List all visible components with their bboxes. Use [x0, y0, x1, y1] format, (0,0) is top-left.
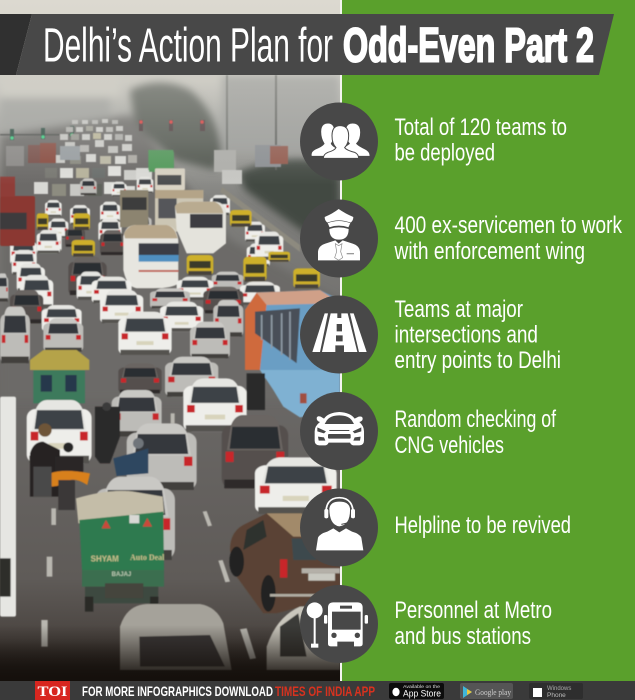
poles and signals — [0, 75, 277, 170]
text: intersections: Teams at major — [394, 296, 523, 323]
mid traffic cars — [48, 218, 68, 238]
text: helpline: Helpline to be revived — [394, 512, 571, 539]
icon: officer — [318, 209, 360, 260]
item 5: helpline — [300, 488, 571, 566]
text: CNG — [394, 406, 556, 459]
logo: TOI — [35, 681, 70, 700]
text: intersections: entry points to Delhi — [394, 347, 561, 374]
item 4: CNG — [300, 392, 556, 470]
item 3: intersections — [300, 296, 561, 374]
badge: App Store: App Store — [403, 688, 441, 698]
text: CNG: Random checking of — [394, 406, 556, 433]
text: intersections — [394, 296, 561, 374]
icon: bus — [324, 602, 368, 646]
text: ex-servicemen: with enforcement wing — [394, 238, 585, 265]
title text: Delhi’s Action Plan for — [43, 20, 333, 72]
green truck — [76, 491, 165, 612]
orange-blue bus lower — [260, 370, 340, 417]
bottom dark fade — [0, 628, 340, 674]
footer text: FOR MORE INFOGRAPHICS DOWNLOAD — [82, 683, 273, 699]
badge: App Store: Available on the — [403, 684, 441, 689]
bottom cars — [120, 604, 232, 670]
badge: App Store — [389, 683, 444, 699]
badge: Windows Phone — [529, 683, 583, 699]
text: metro and bus: Personnel at Metro — [394, 597, 552, 624]
text: CNG: CNG vehicles — [394, 432, 504, 459]
icon: bus stop — [307, 602, 368, 648]
photo: traffic jam in smog — [0, 0, 340, 681]
green truck: BAJAJ — [112, 572, 131, 578]
top cars — [118, 363, 162, 393]
lower section — [0, 350, 340, 670]
panel: green background — [342, 0, 635, 681]
motorbikes — [30, 373, 265, 510]
text: metro and bus — [394, 597, 552, 650]
icon: car — [315, 412, 364, 445]
text: intersections: intersections and — [394, 322, 538, 348]
green truck: SHYAM — [91, 555, 119, 564]
logo: TOI: TOI — [38, 684, 68, 700]
near cars upper — [212, 272, 243, 292]
badge: Windows Phone: Windows — [547, 686, 571, 692]
item 1: teams — [300, 102, 567, 180]
top haze — [0, 75, 340, 185]
text: teams: Total of 120 teams to — [394, 114, 567, 141]
text: teams — [394, 114, 567, 167]
buses — [0, 150, 226, 288]
badge: Google play — [460, 683, 513, 699]
text: metro and bus: and bus stations — [394, 623, 531, 650]
badge: Windows Phone: Phone — [547, 692, 566, 699]
text: teams: be deployed — [394, 140, 495, 167]
item 2: ex-servicemen — [300, 200, 623, 278]
white bus left — [0, 397, 16, 617]
text: ex-servicemen — [394, 212, 623, 265]
distant traffic — [6, 119, 288, 197]
badge: Google play: Google play — [475, 687, 512, 697]
divider — [340, 0, 342, 681]
autos yellow — [73, 213, 90, 230]
icon: group of people — [311, 123, 370, 158]
lane marks — [41, 413, 256, 659]
green truck: Auto Deal — [130, 553, 165, 562]
brown SUV — [229, 513, 340, 613]
item 6: metro and bus — [300, 585, 552, 663]
guard rail — [224, 194, 300, 252]
icon: road — [312, 313, 367, 352]
orange bus upper — [245, 290, 340, 370]
footer app name: TIMES OF INDIA APP — [275, 683, 375, 699]
title banner — [0, 14, 614, 75]
footer bar — [0, 681, 635, 700]
icon: headset agent — [316, 498, 363, 550]
green truck top — [30, 350, 89, 370]
